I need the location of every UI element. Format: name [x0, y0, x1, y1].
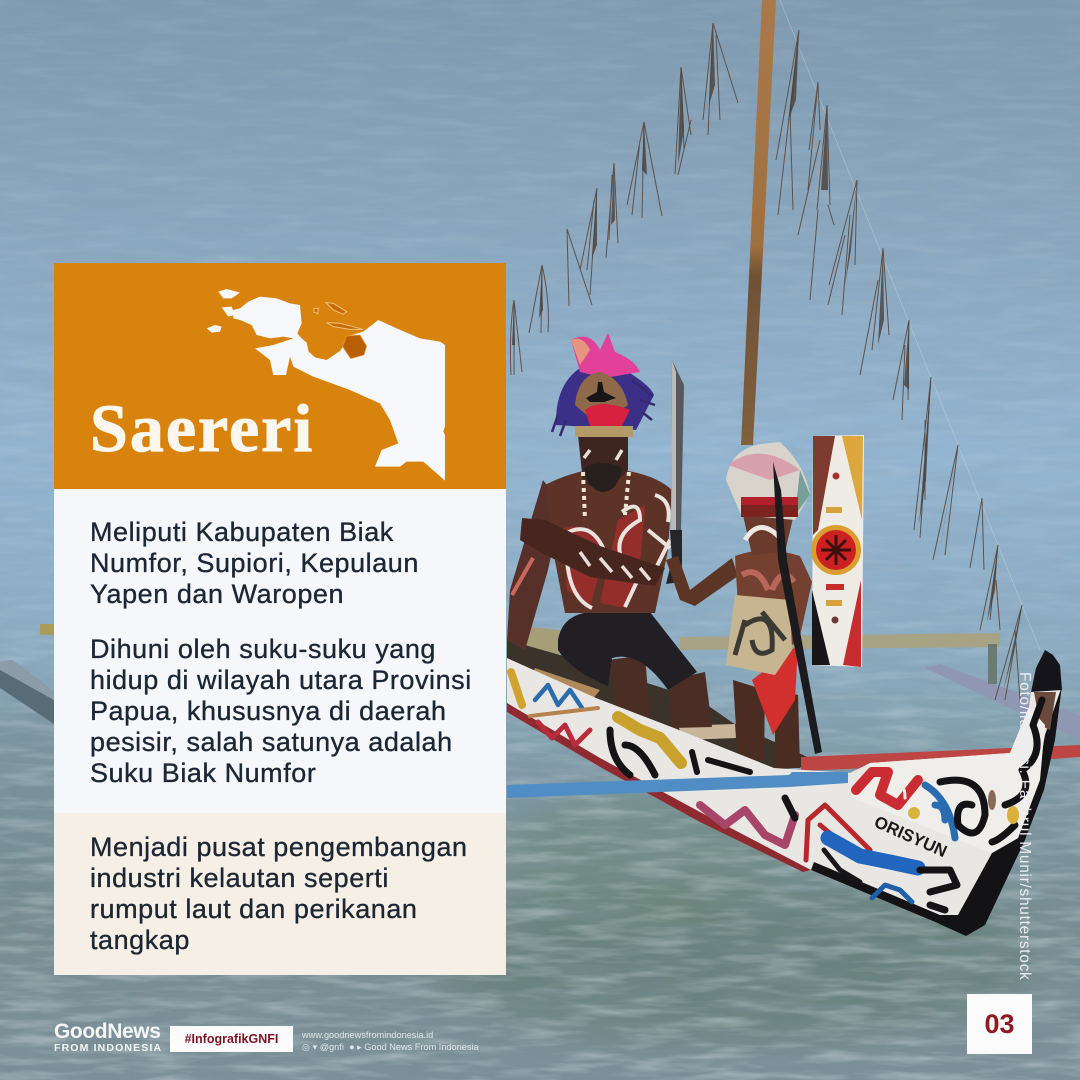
man: shorts: [558, 612, 697, 690]
text: inhabitants: Papua, khususnya di daerah: [90, 696, 447, 726]
map: western islands: [207, 289, 240, 333]
man: necklace: [583, 472, 629, 520]
child: red loincloth: [752, 645, 798, 735]
rear cross beam: [520, 626, 1000, 684]
text: coverage: Yapen dan Waropen: [90, 579, 344, 609]
text: inhabitants: hidup di wilayah utara Provinsi: [90, 665, 472, 695]
map: Saereri highlighted region: [343, 335, 367, 359]
child: arm: [666, 556, 738, 606]
page number: [967, 994, 1032, 1054]
canoe: front upper panel: [850, 707, 1045, 853]
canoe: black bow keel: [811, 686, 1062, 936]
man: head: [578, 432, 628, 487]
man: crossed arm: [520, 518, 665, 586]
map: Saereri islands: [314, 303, 363, 329]
tassel dark cores: [512, 23, 1022, 692]
text: industry: rumput laut dan perikanan: [90, 894, 417, 924]
child: torso: [735, 550, 812, 645]
website and social handles: www.goodnewsfromindonesia.id: [302, 1030, 433, 1040]
man: red body paint: [563, 505, 645, 608]
panel: header with map: [54, 263, 506, 489]
right outrigger float: [925, 664, 1080, 740]
red outrigger beam: [801, 745, 1080, 771]
panel: marine industry: [54, 813, 506, 975]
panel: description: [54, 489, 506, 813]
hashtag label: #InfografikGNFI: [185, 1032, 278, 1046]
man: white body paint: [512, 495, 670, 608]
canoe: name ORISYUN: ORISYUN: [871, 812, 950, 861]
text: industry: Menjadi pusat pengembangan: [90, 832, 468, 862]
man: left arm: [507, 480, 562, 650]
text: coverage: Numfor, Supiori, Kepulaun: [90, 548, 419, 578]
man: torso: [545, 468, 672, 613]
map of Papua: [206, 289, 445, 480]
man: headdress: [552, 333, 655, 437]
child's spear: [773, 462, 822, 754]
painted paddle shield: [811, 435, 864, 667]
text: industry: industri kelautan seperti: [90, 863, 389, 893]
text: inhabitants: Suku Biak Numfor: [90, 758, 316, 788]
map: Papua mainland: [233, 297, 445, 481]
website and social handles: [302, 1030, 479, 1052]
title: Saereri: [90, 390, 314, 466]
hashtag label: [170, 1026, 293, 1052]
child: headdress: [726, 442, 810, 520]
logo: GoodNews from Indonesia: FROM INDONESIA: [54, 1042, 162, 1054]
text: inhabitants: pesisir, salah satunya adalah: [90, 727, 453, 757]
child in traditional costume: [666, 442, 812, 768]
canoe interior: [507, 640, 825, 770]
text: industry: [90, 832, 468, 955]
website and social handles: ◎ ▾ @gnfi ● ▸ Good News From Indonesia: [302, 1042, 479, 1052]
text: inhabitants: Dihuni oleh suku-suku yang: [90, 634, 436, 664]
man: legs: [608, 655, 712, 728]
logo: GoodNews from Indonesia: [54, 1020, 162, 1054]
child: head: [743, 515, 793, 555]
child: legs: [733, 680, 800, 768]
logo: GoodNews from Indonesia: GoodNews: [54, 1020, 160, 1043]
page number: 03: [984, 1009, 1015, 1039]
canoe hull: [507, 650, 1062, 936]
mast: [741, 0, 776, 445]
child: woven bag: [726, 595, 792, 675]
text: industry: tangkap: [90, 925, 190, 955]
text: coverage: Meliputi Kabupaten Biak: [90, 517, 394, 547]
canoe: white side: [507, 658, 1062, 935]
machete: [666, 360, 684, 584]
canoe: bow ornament: [1031, 650, 1062, 692]
man in traditional costume: [507, 333, 712, 728]
canoe: red waterline: [507, 703, 811, 872]
blue outrigger beam: [507, 772, 848, 798]
left outrigger float: [0, 624, 54, 724]
canoe: patterns: [511, 672, 1042, 910]
hanging tassels on the rope: [510, 0, 1040, 700]
text: inhabitants: [90, 634, 472, 788]
photo credit: Foto/ilustrasi: Fachrul Munir/shutterstock: [1016, 672, 1033, 980]
text: coverage: [90, 517, 419, 609]
